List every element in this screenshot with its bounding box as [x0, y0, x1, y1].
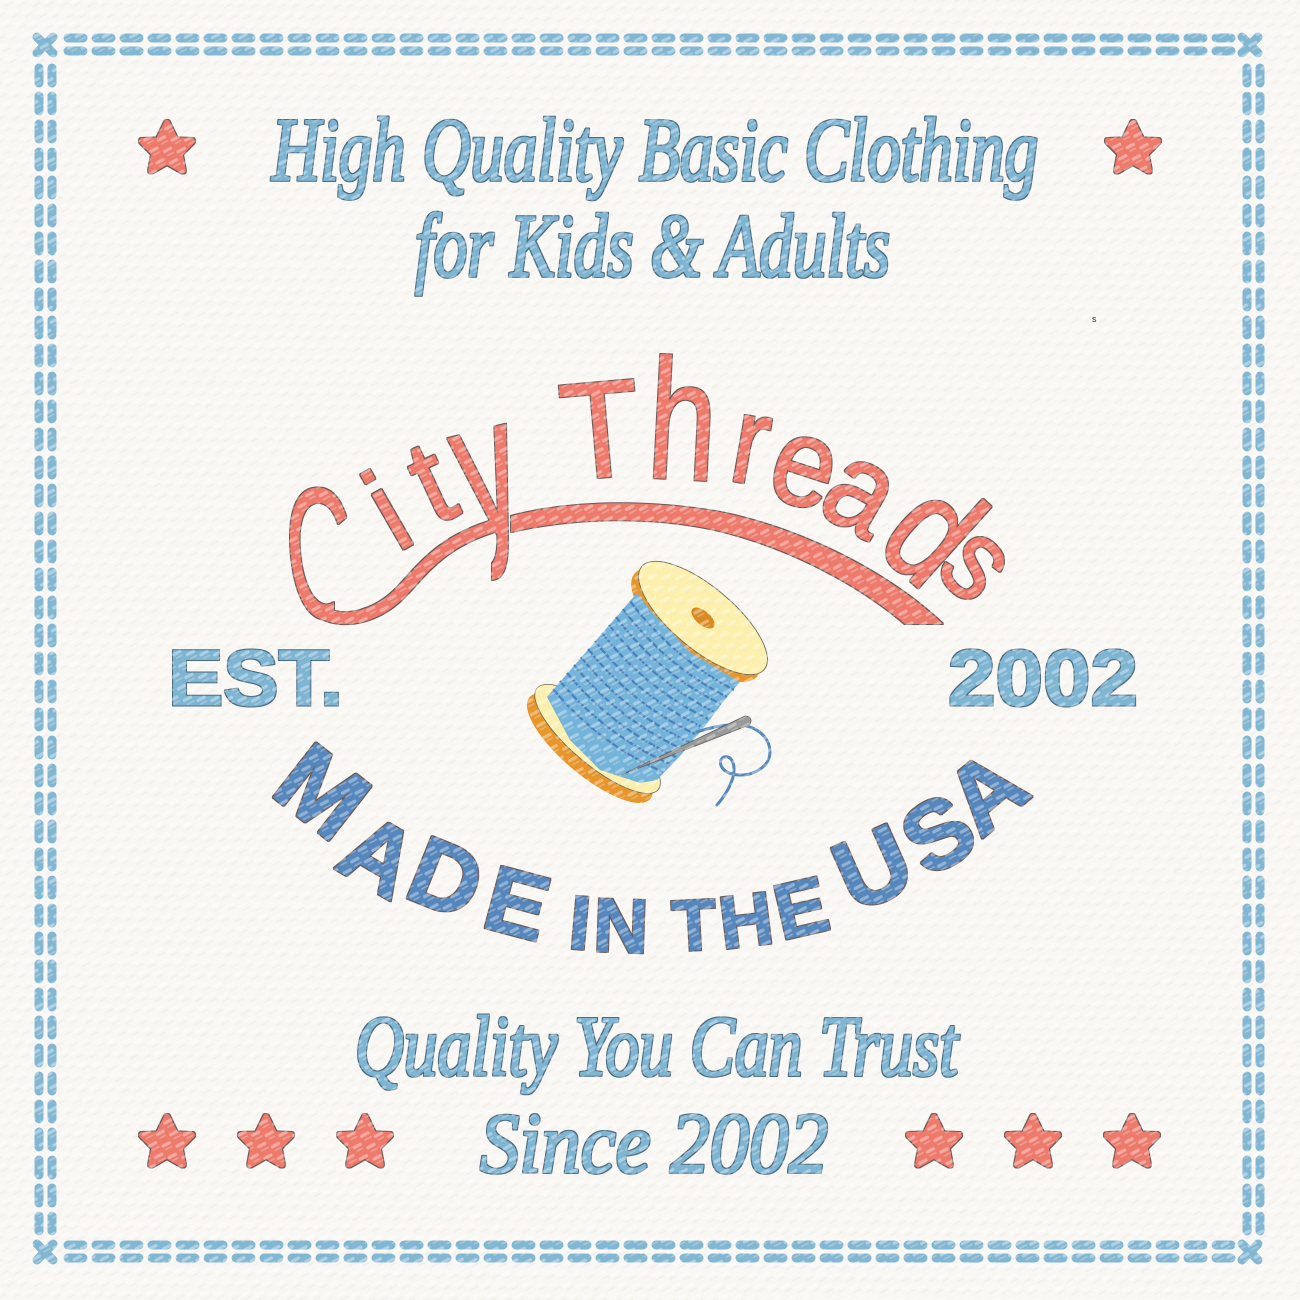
- swoosh arc: [511, 503, 943, 624]
- icon: thread spool: [512, 543, 784, 820]
- wordmark letters: s: [916, 498, 1043, 625]
- arched text: made in the usa: E: [474, 847, 560, 961]
- needle: [621, 716, 751, 775]
- arched text: made in the usa: T: [670, 885, 718, 967]
- arched text: made in the usa: A: [322, 793, 436, 920]
- top flange rim: [614, 549, 778, 701]
- heading: high quality basic clothing: [271, 101, 1038, 296]
- tagline: quality you can trust: Since 2002: [480, 1095, 828, 1191]
- bottom flange: [512, 668, 675, 820]
- wordmark letters: i: [344, 449, 432, 575]
- wordmark letters: d: [851, 447, 1014, 617]
- arched text: made in the usa: [255, 722, 1047, 970]
- arched text: made in the usa: E: [766, 859, 836, 957]
- wordmark letters: [344, 325, 1043, 625]
- loose thread: [697, 725, 770, 805]
- thread windings: [553, 601, 734, 772]
- heading: high quality basic clothing: High Quality Basic Clothing: [271, 101, 1038, 200]
- arched text: made in the usa: N: [592, 883, 650, 970]
- arched text: made in the usa: S: [883, 772, 994, 897]
- wordmark letter y: y: [429, 351, 542, 583]
- heading: high quality basic clothing: for Kids & Adults: [415, 197, 890, 296]
- tagline: quality you can trust: [355, 998, 960, 1191]
- swoosh tail: [322, 525, 497, 618]
- arched text: made in the usa: M: [255, 722, 389, 862]
- label: est: EST.: [168, 633, 343, 722]
- arched text: made in the usa: U: [817, 802, 929, 934]
- stray letter: s: [1092, 314, 1097, 324]
- label: 2002: 2002: [948, 633, 1138, 722]
- wordmark letters: T: [554, 351, 647, 510]
- tagline: quality you can trust: Quality You Can Trust: [355, 998, 960, 1094]
- arched text: made in the usa: A: [925, 729, 1047, 856]
- wordmark letters: a: [801, 413, 926, 565]
- star row: top: [142, 123, 1158, 170]
- top flange face: [622, 543, 784, 693]
- wordmark letters: t: [388, 414, 473, 549]
- thread body: [547, 593, 740, 783]
- star row: bottom: [142, 1117, 1157, 1164]
- wordmark letter C: C: [276, 448, 364, 661]
- arched text: made in the usa: D: [394, 816, 498, 941]
- logo: city threads: [289, 353, 1005, 626]
- arched text: made in the usa: I: [566, 880, 594, 967]
- wordmark letters: e: [755, 387, 857, 539]
- arched text: made in the usa: H: [714, 876, 778, 965]
- wordmark letters: h: [644, 325, 722, 517]
- wordmark letters: r: [722, 368, 781, 512]
